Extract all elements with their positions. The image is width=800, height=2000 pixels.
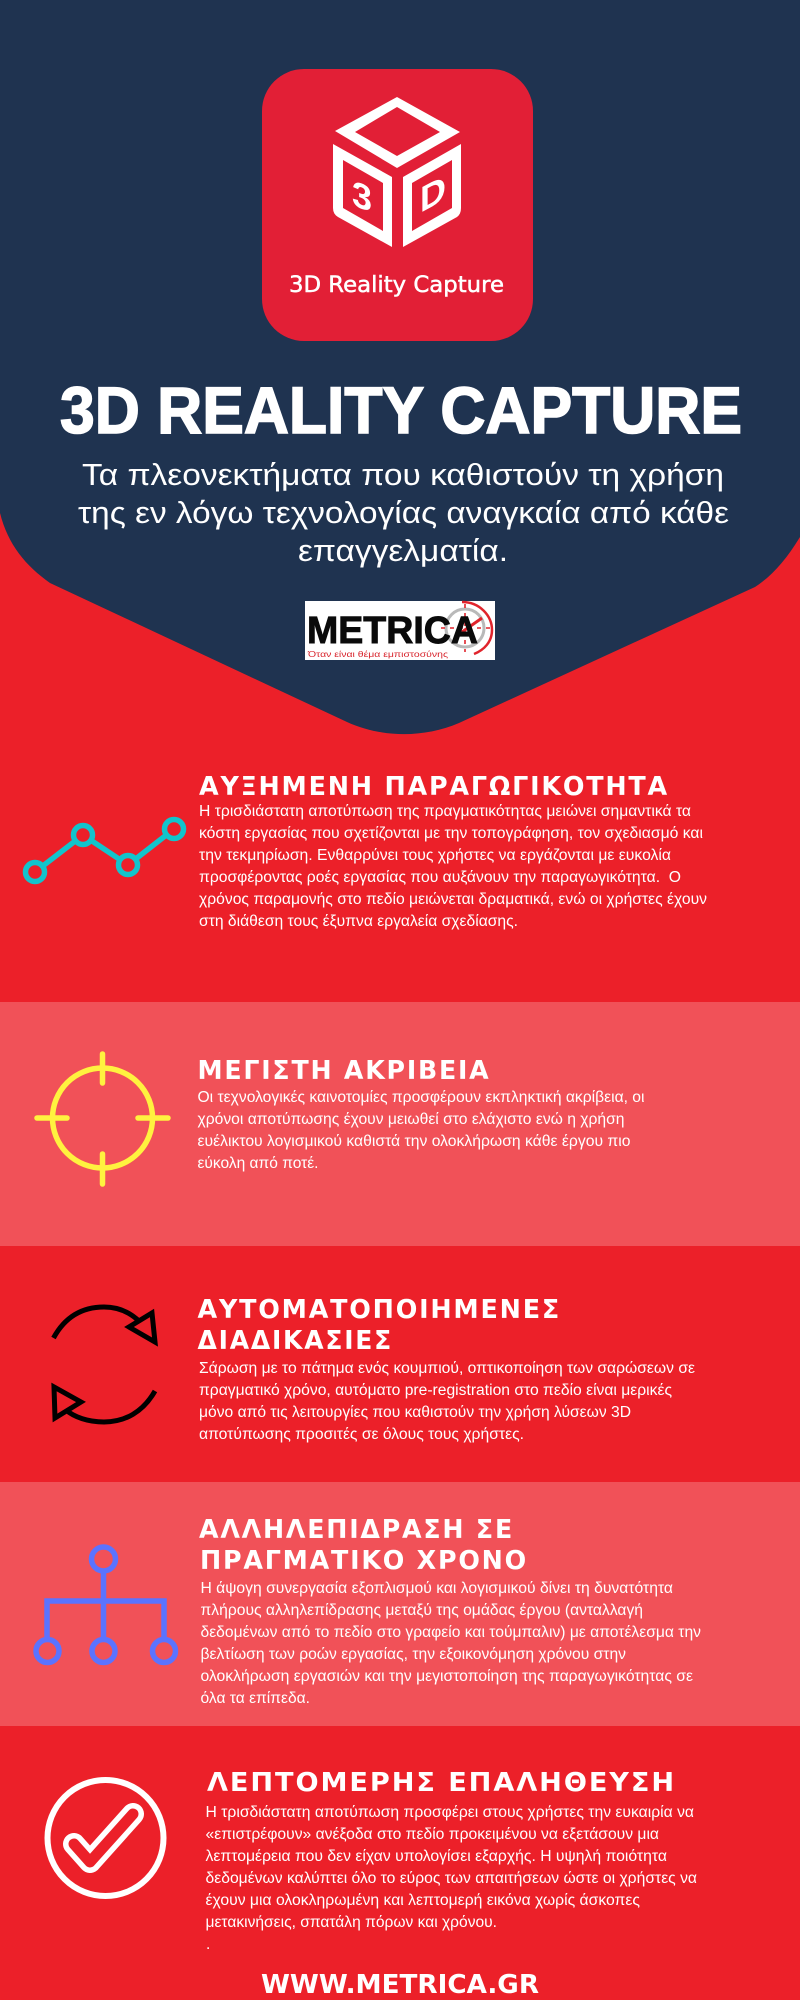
body text: βελτίωση των ροών εργασίας, την εξοικονόμηση χρόνου στην: [200, 1646, 626, 1663]
heading: ΑΥΤΟΜΑΤΟΠΟΙΗΜΕΝΕΣ: [198, 1295, 561, 1325]
body text: Η τρισδιάστατη αποτύπωση της πραγματικότητας μειώνει σημαντικά τα: [199, 803, 691, 820]
body text: [198, 1089, 644, 1172]
body text: ευέλικτου λογισμικού καθιστά την ολοκλήρωση κάθε έργου πιο: [198, 1133, 630, 1150]
body text: όλα τα επίπεδα.: [200, 1690, 310, 1707]
panel: automated procedures: [0, 1246, 800, 1482]
title: 3D REALITY CAPTURE: [60, 373, 742, 447]
body text: Η άψογη συνεργασία εξοπλισμού και λογισμικού δίνει τη δυνατότητα: [200, 1580, 673, 1597]
navy header shape: [0, 0, 800, 734]
body text: δεδομένων από το πεδίο στο γραφείο και τούμπαλιν) με αποτέλεσμα την: [200, 1624, 701, 1641]
body text: [200, 1580, 701, 1707]
panel: increased productivity: [0, 745, 800, 1002]
body text: κόστη εργασίας που σχετίζονται με την τοπογράφηση, τον σχεδιασμό και: [199, 825, 703, 842]
icon: check mark in circle: [48, 1780, 164, 1896]
subtitle: της εν λόγω τεχνολογίας αναγκαία από κάθε: [78, 496, 729, 530]
heading: ΜΕΓΙΣΤΗ ΑΚΡΙΒΕΙΑ: [198, 1056, 490, 1086]
body text: Σάρωση με το πάτημα ενός κουμπιού, οπτικοποίηση των σαρώσεων σε: [199, 1360, 695, 1377]
badge caption: 3D Reality Capture: [289, 273, 504, 298]
heading: ΠΡΑΓΜΑΤΙΚΟ ΧΡΟΝΟ: [200, 1546, 528, 1576]
body text: [199, 1360, 695, 1443]
body text: έχουν μια ολοκληρωμένη και λεπτομερή εικόνα χωρίς άσκοπες: [206, 1892, 640, 1909]
panel: header: [0, 0, 800, 734]
cube letter D: D: [420, 167, 446, 221]
cube top face: [335, 97, 460, 168]
logo wordmark: METRICA: [307, 610, 478, 652]
body text: Η τρισδιάστατη αποτύπωση προσφέρει στους χρήστες την ευκαιρία να: [206, 1804, 694, 1821]
cube letter 3: 3: [352, 172, 372, 220]
body text: χρόνοι αποτύπωσης έχουν μειωθεί στο ελάχιστο ενώ η χρήση: [198, 1111, 624, 1128]
body text: λεπτομέρεια που δεν είχαν υπολογίσει εξαρχής. Η υψηλή ποιότητα: [206, 1848, 667, 1865]
body text: χρόνος παραμονής στο πεδίο μειώνεται δραματικά, ενώ οι χρήστες έχουν: [199, 891, 707, 908]
heading: ΑΛΛΗΛΕΠΙΔΡΑΣΗ ΣΕ: [199, 1515, 514, 1545]
body text: εύκολη από ποτέ.: [198, 1155, 318, 1172]
logo tagline: Όταν είναι θέμα εμπιστοσύνης: [307, 649, 448, 659]
panel: detailed verification: [0, 1726, 800, 2000]
compass mark: [441, 602, 492, 654]
body text: αποτύπωσης προσιτές σε όλους τους χρήστες.: [199, 1426, 524, 1443]
cube left face: [333, 144, 392, 247]
icon: refresh arrows: [54, 1307, 155, 1422]
heading: ΔΙΑΔΙΚΑΣΙΕΣ: [198, 1326, 393, 1356]
panel: maximum accuracy: [0, 1002, 800, 1246]
body text: .: [206, 1936, 210, 1953]
body text: [206, 1804, 697, 1953]
subtitle: Τα πλεονεκτήματα που καθιστούν τη χρήση: [82, 458, 724, 492]
body text: Οι τεχνολογικές καινοτομίες προσφέρουν εκπληκτική ακρίβεια, οι: [198, 1089, 644, 1106]
body text: ολοκλήρωση εργασιών και την μεγιστοποίηση της παραγωγικότητας σε: [200, 1668, 693, 1685]
heading: [199, 1515, 528, 1576]
icon: hierarchy network: [36, 1547, 176, 1662]
panel: real-time interaction: [0, 1482, 800, 1726]
website link text: WWW.METRICA.GR: [261, 1970, 539, 2000]
body text: «επιστρέφουν» ανέξοδα στο πεδίο προκειμένου να εξετάσουν μια: [206, 1826, 659, 1843]
heading: [198, 1295, 561, 1356]
body text: την τεκμηρίωση. Ενθαρρύνει τους χρήστες να εργάζονται με ευκολία: [199, 847, 671, 864]
icon: line chart: [26, 820, 184, 882]
cube right face: [403, 144, 461, 247]
body text: μετακινήσεις, σπατάλη πόρων και χρόνου.: [206, 1914, 497, 1931]
icon: 3D Reality Capture app badge: [262, 69, 533, 341]
subtitle: [78, 458, 729, 568]
body text: δεδομένων καλύπτει όλο το εύρος των απαιτήσεων ώστε οι χρήστες να: [206, 1870, 697, 1887]
body text: πλήρους αλληλεπίδρασης μεταξύ της ομάδας έργου (ανταλλαγή: [200, 1602, 643, 1619]
subtitle: επαγγελματία.: [298, 534, 508, 568]
heading: ΑΥΞΗΜΕΝΗ ΠΑΡΑΓΩΓΙΚΟΤΗΤΑ: [199, 772, 669, 802]
icon: crosshair: [37, 1054, 168, 1184]
heading: ΛΕΠΤΟΜΕΡΗΣ ΕΠΑΛΗΘΕΥΣΗ: [207, 1768, 676, 1798]
body text: μόνο από τις λειτουργίες που καθιστούν την χρήση λύσεων 3D: [199, 1404, 631, 1421]
logo: METRICA: [305, 601, 495, 660]
body text: στη διάθεση τους έξυπνα εργαλεία σχεδίασης.: [199, 913, 518, 930]
body text: πραγματικό χρόνο, αυτόματο pre-registration στο πεδίο είναι μερικές: [199, 1382, 672, 1399]
body text: [199, 803, 707, 930]
body text: προσφέροντας ροές εργασίας που αυξάνουν την παραγωγικότητα. Ο: [199, 869, 681, 886]
